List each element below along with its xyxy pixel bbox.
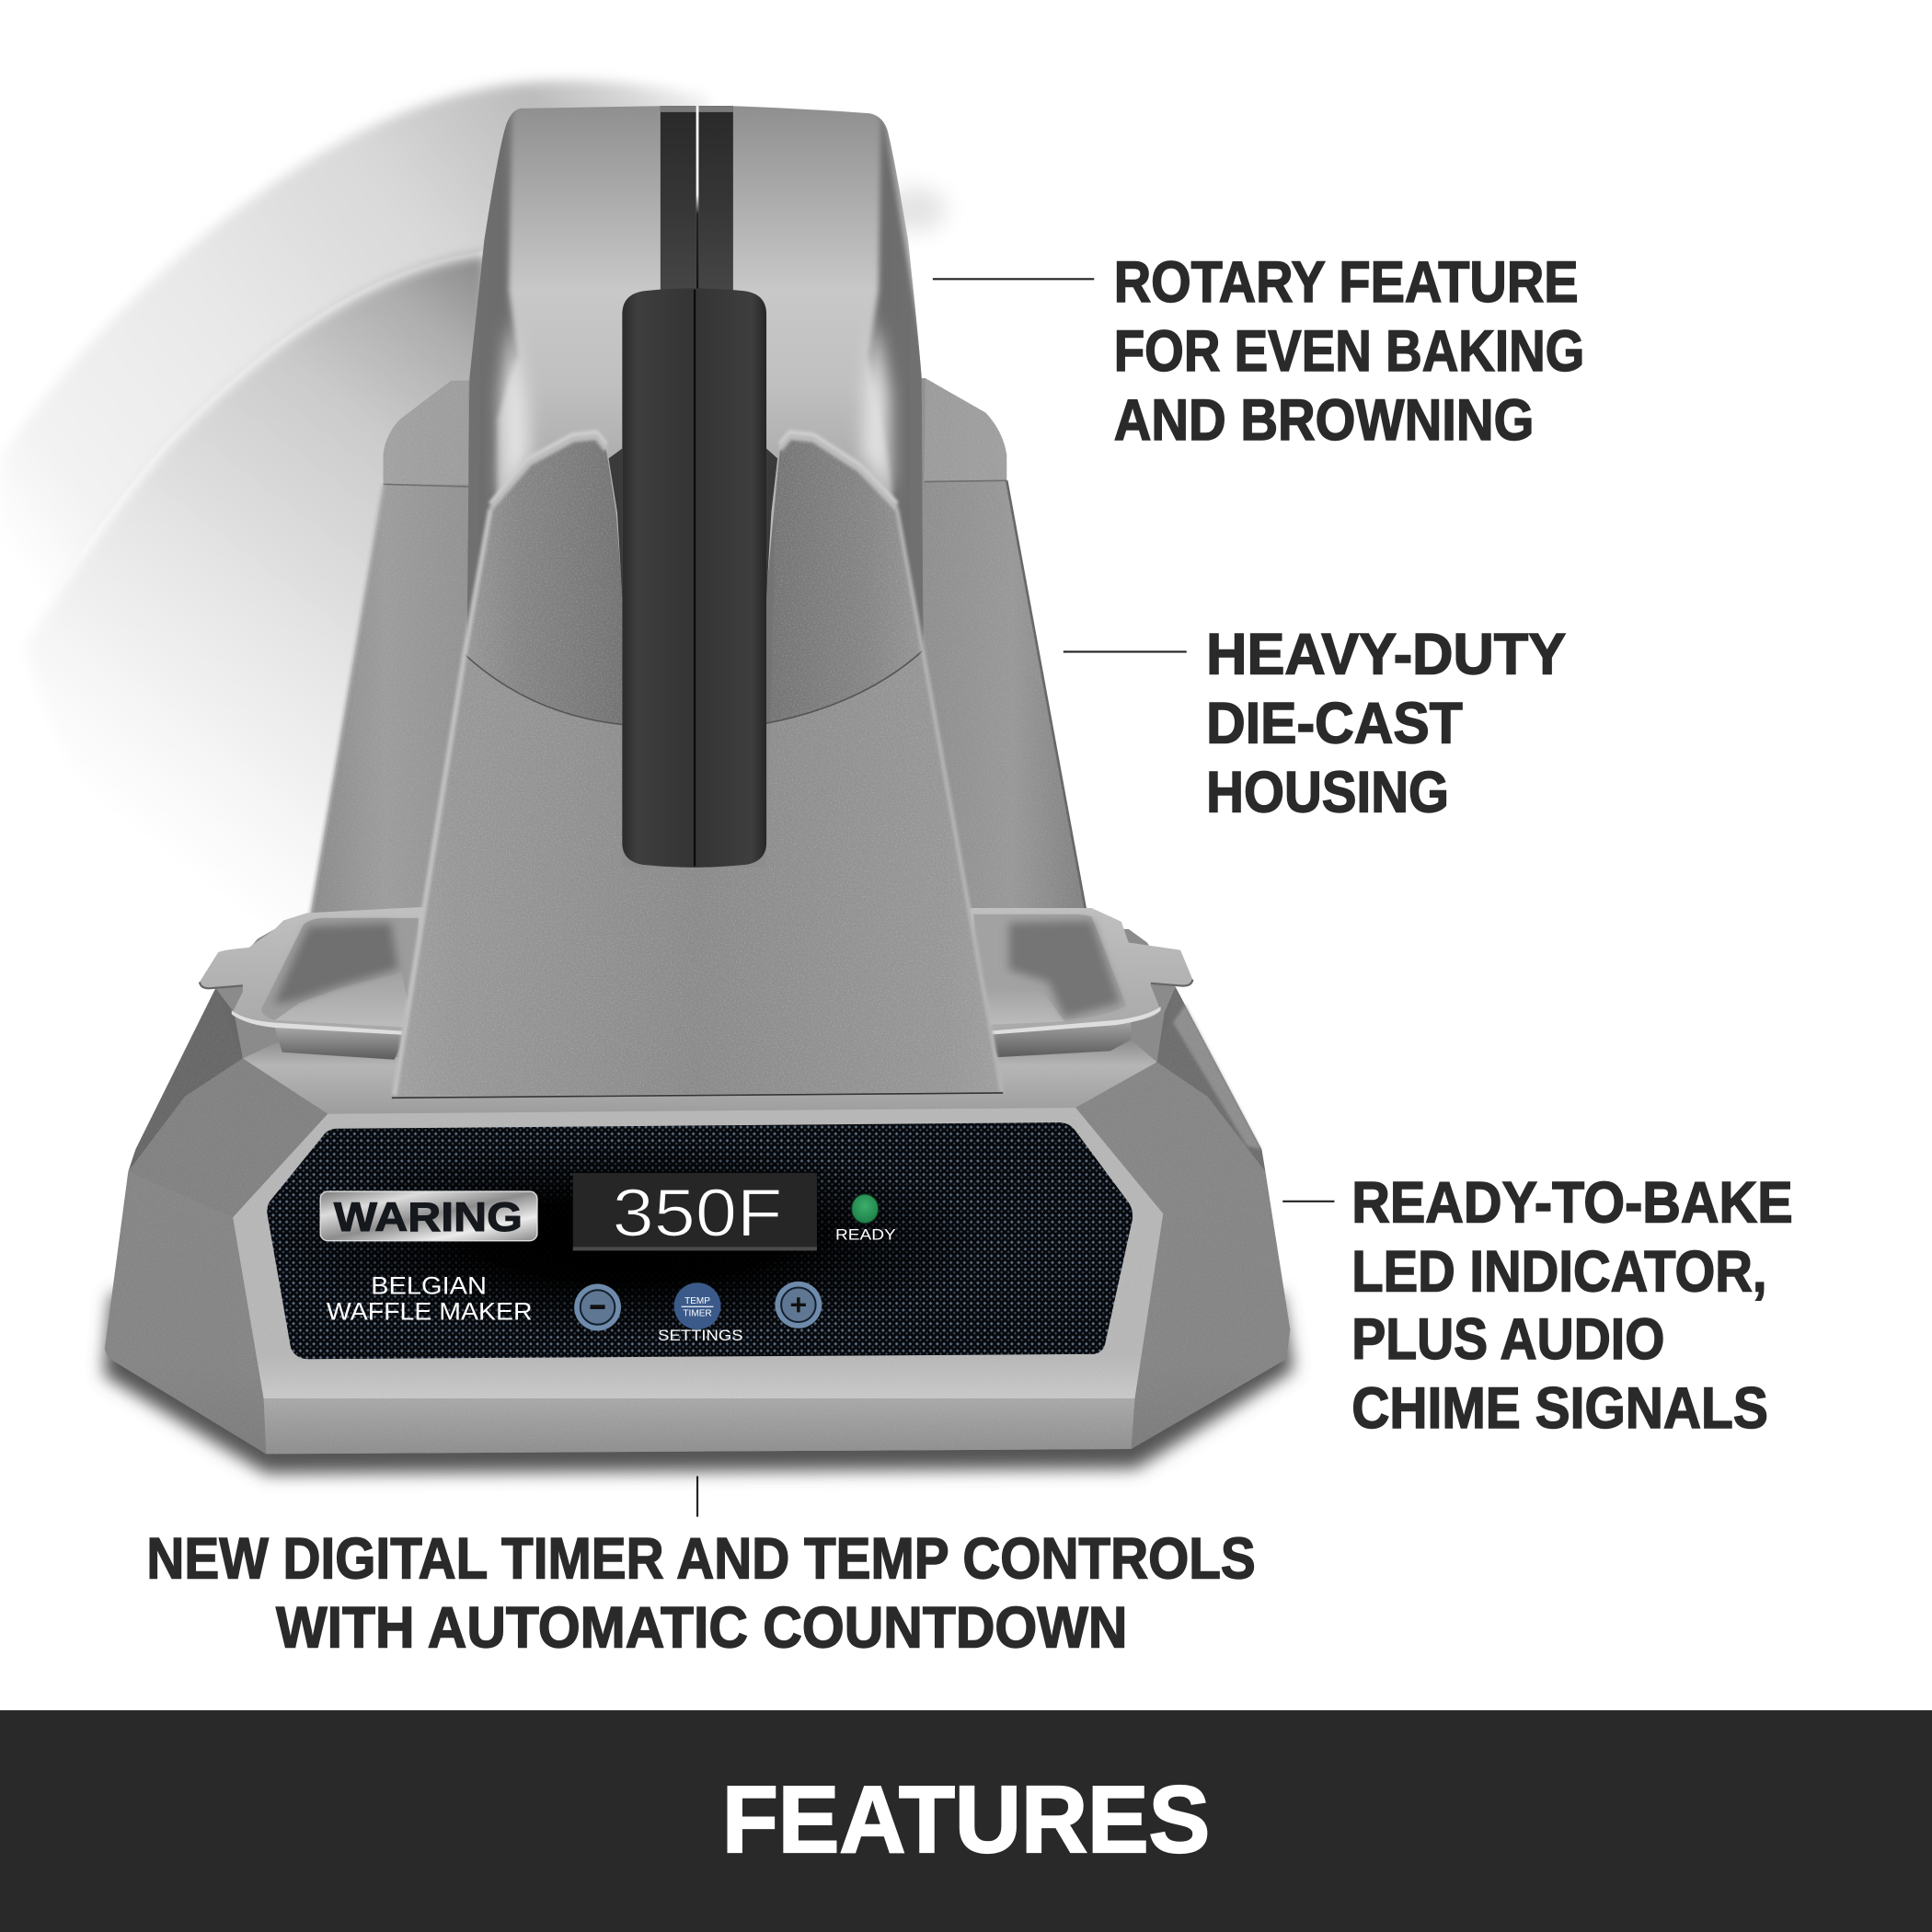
product name: WAFFLE MAKER bbox=[327, 1297, 533, 1325]
temp/timer button bbox=[674, 1282, 720, 1329]
left tray bbox=[200, 907, 425, 1060]
dark hinge behind handle bbox=[609, 449, 777, 598]
floor bbox=[275, 972, 413, 1028]
callout: LED indicator: PLUS AUDIO bbox=[1351, 1307, 1664, 1372]
lower band bbox=[264, 1398, 1134, 1454]
footer band bbox=[0, 1710, 1932, 1932]
callout: rotary feature bbox=[1114, 250, 1584, 453]
settings label: SETTINGS bbox=[658, 1327, 743, 1344]
base shadow bbox=[103, 1294, 1294, 1474]
back shadow bbox=[1009, 920, 1120, 1018]
rear housing bbox=[306, 375, 1096, 943]
left dark strip bbox=[128, 988, 243, 1172]
base body bbox=[105, 929, 1290, 1454]
callout: housing bbox=[1206, 623, 1566, 825]
right dark rim bbox=[867, 118, 924, 650]
right dark strip bbox=[1157, 987, 1265, 1172]
callout: rotary feature: FOR EVEN BAKING bbox=[1114, 319, 1584, 384]
front face bbox=[233, 1108, 1163, 1398]
leader line: controls bbox=[696, 1476, 698, 1517]
grain bbox=[392, 431, 1008, 1103]
product: rotary waffle maker bbox=[306, 105, 1096, 943]
bucket bbox=[275, 1028, 407, 1060]
callout: digital controls: WITH AUTOMATIC COUNTDOWN bbox=[276, 1596, 1127, 1661]
pedestal bbox=[392, 288, 1008, 1103]
top plate bbox=[243, 1040, 1157, 1114]
floor bbox=[980, 988, 1064, 1025]
leader line: housing bbox=[1064, 650, 1187, 652]
callout: LED indicator: LED INDICATOR, bbox=[1351, 1240, 1767, 1305]
grain bbox=[98, 985, 1300, 1460]
left dark rim bbox=[467, 112, 519, 635]
pedestal upper section bbox=[465, 437, 923, 727]
pedestal lower section bbox=[392, 650, 1003, 1097]
right main face bbox=[1131, 1172, 1290, 1449]
rotation motion swoosh bbox=[0, 80, 947, 985]
footer title: FEATURES bbox=[722, 1766, 1210, 1872]
base front bbox=[98, 985, 1300, 1460]
product name: BELGIAN bbox=[371, 1271, 487, 1299]
callout: LED indicator: CHIME SIGNALS bbox=[1351, 1376, 1768, 1441]
ear glow bbox=[490, 432, 897, 504]
leader line: LED bbox=[1282, 1201, 1334, 1202]
right upper face bbox=[1075, 1062, 1265, 1213]
callout: digital controls: NEW DIGITAL TIMER AND TEMP CONTROLS bbox=[146, 1527, 1256, 1592]
callout: LED indicator bbox=[1351, 1171, 1793, 1441]
callout: digital controls bbox=[146, 1527, 1256, 1661]
well bbox=[973, 914, 1126, 1025]
black centre band bbox=[661, 106, 733, 303]
waffle plate drum bbox=[467, 106, 924, 723]
back shadow bbox=[273, 923, 398, 1005]
right edge sheen bbox=[1173, 1005, 1261, 1150]
digital display: 350F bbox=[613, 1174, 782, 1250]
rim bbox=[200, 907, 425, 1035]
plus button bbox=[775, 1282, 822, 1328]
temp/timer button: TEMP bbox=[684, 1296, 710, 1306]
dish surface bbox=[462, 105, 930, 770]
left main face bbox=[105, 1172, 266, 1454]
product name bbox=[327, 1271, 533, 1325]
left bright band bbox=[501, 320, 530, 502]
callout: rotary feature: ROTARY FEATURE bbox=[1114, 250, 1579, 315]
callout: housing: HEAVY-DUTY bbox=[1206, 623, 1566, 687]
well bbox=[261, 918, 419, 1028]
rim bbox=[967, 908, 1192, 1035]
minus button bbox=[574, 1284, 621, 1330]
callout: rotary feature: AND BROWNING bbox=[1114, 388, 1534, 453]
bucket bbox=[985, 1020, 1131, 1057]
pedestal edges bbox=[392, 437, 1003, 1098]
temp/timer button: TIMER bbox=[683, 1308, 712, 1318]
handle bbox=[622, 288, 766, 868]
digital display bbox=[573, 1173, 817, 1250]
logo: Waring: WARING bbox=[334, 1195, 523, 1240]
right tray bbox=[967, 908, 1192, 1057]
ready LED bbox=[851, 1194, 879, 1224]
right bright band bbox=[863, 320, 890, 493]
control panel bbox=[267, 1122, 1133, 1359]
left upper face bbox=[128, 1058, 328, 1217]
callout: LED indicator: READY-TO-BAKE bbox=[1351, 1171, 1793, 1236]
ready label: READY bbox=[835, 1225, 896, 1243]
callout: housing: DIE-CAST bbox=[1206, 692, 1463, 756]
callout: housing: HOUSING bbox=[1206, 761, 1449, 825]
leader line: rotary bbox=[933, 278, 1094, 280]
base backing silhouette bbox=[105, 929, 1290, 1454]
